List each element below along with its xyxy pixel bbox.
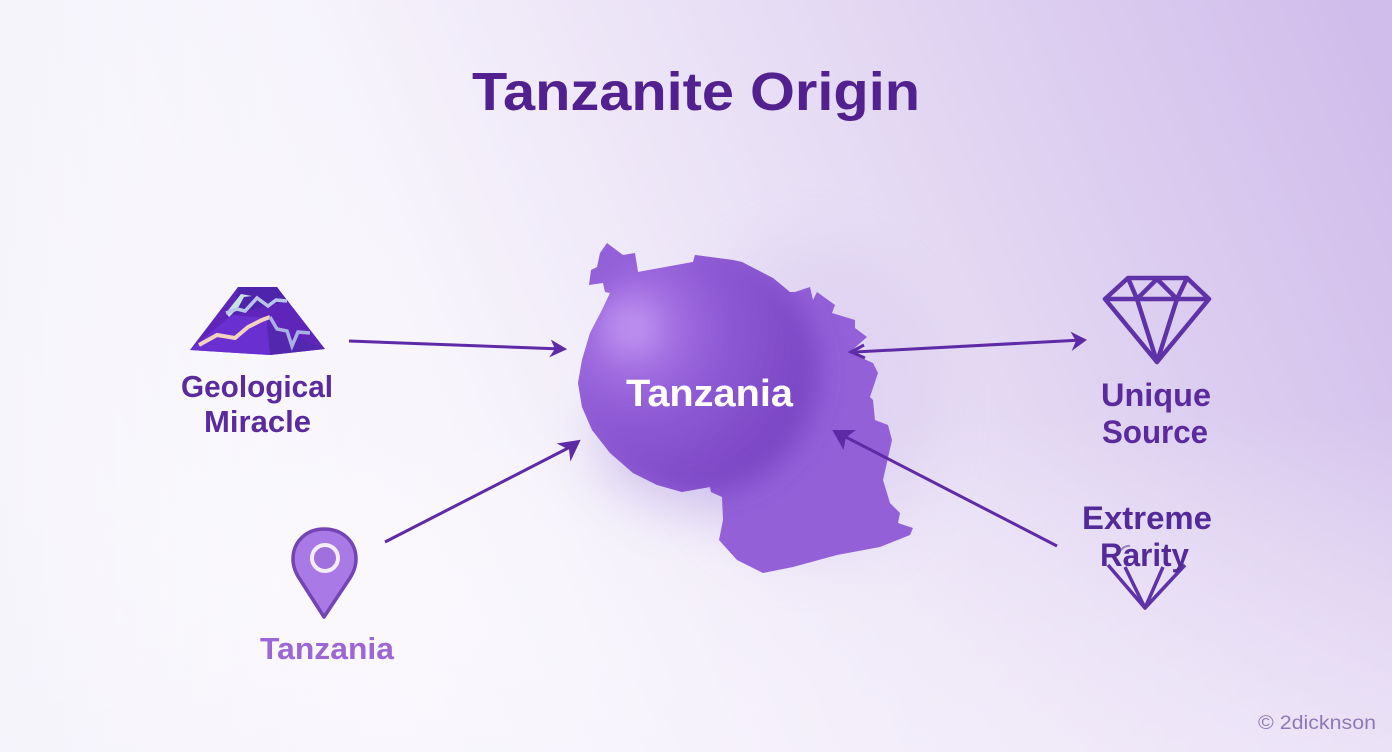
label: tanzania pin: Tanzania	[260, 631, 395, 666]
map label: Tanzania	[626, 373, 794, 415]
label: extreme rarity: Rarity	[1100, 537, 1189, 573]
label: unique source: Unique	[1101, 377, 1211, 413]
icon: map pin	[293, 529, 356, 617]
label: extreme rarity: Extreme	[1082, 500, 1212, 536]
title: Tanzanite Origin	[472, 62, 920, 122]
icon: lower diamond	[1108, 546, 1185, 608]
icon: geological pyramid	[190, 287, 325, 355]
icon: diamond	[1105, 278, 1209, 362]
label: geological miracle: Geological	[181, 369, 333, 404]
map: Tanzania	[575, 243, 913, 573]
label: geological miracle	[181, 369, 333, 439]
arrow: pin to map	[385, 441, 579, 542]
label: unique source	[1101, 377, 1211, 450]
watermark: © 2dicknson	[1258, 713, 1376, 734]
arrow: extreme rarity to map	[834, 431, 1057, 546]
label: extreme rarity	[1082, 500, 1212, 573]
arrow: unique source double-headed	[851, 334, 1085, 358]
map shadow	[595, 240, 940, 560]
label: unique source: Source	[1102, 414, 1208, 450]
label: geological miracle: Miracle	[204, 404, 311, 439]
arrow: geological miracle to map	[349, 341, 565, 355]
